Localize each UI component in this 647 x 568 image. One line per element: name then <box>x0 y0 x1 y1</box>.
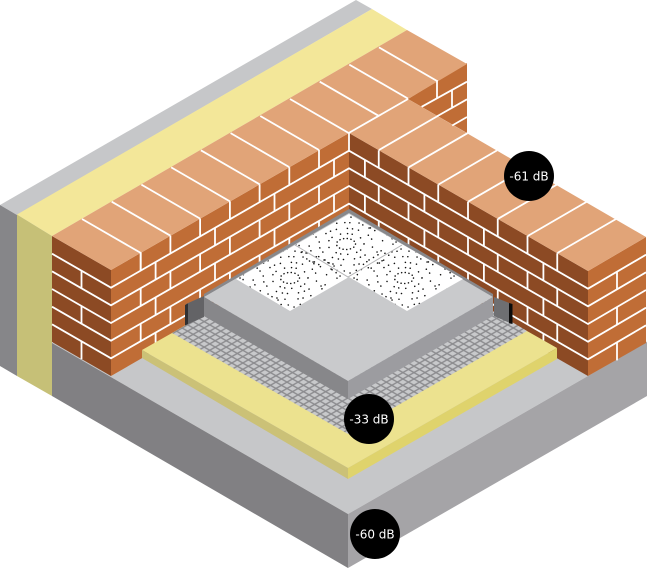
label: -60 dB: -60 dB <box>355 528 395 542</box>
acoustic tiles <box>236 214 463 311</box>
label: -33 dB: -33 dB <box>349 412 389 426</box>
label: -61 dB: -61 dB <box>509 170 549 184</box>
brick faces <box>52 63 646 376</box>
reinforcement mesh <box>172 230 527 434</box>
wall insulation layer <box>17 9 407 396</box>
floor insulation board <box>142 230 557 479</box>
concrete back wall <box>0 0 372 376</box>
right edge strip <box>494 297 512 324</box>
mortar joints <box>52 47 646 360</box>
brick top surface <box>52 30 646 271</box>
concrete floor slab <box>52 170 647 568</box>
label: -61 dB <box>504 151 554 201</box>
label: -60 dB <box>350 509 400 559</box>
left edge strip <box>185 296 204 326</box>
label: -33 dB <box>344 394 394 444</box>
brick walls <box>52 30 646 376</box>
screed slab <box>204 209 493 399</box>
